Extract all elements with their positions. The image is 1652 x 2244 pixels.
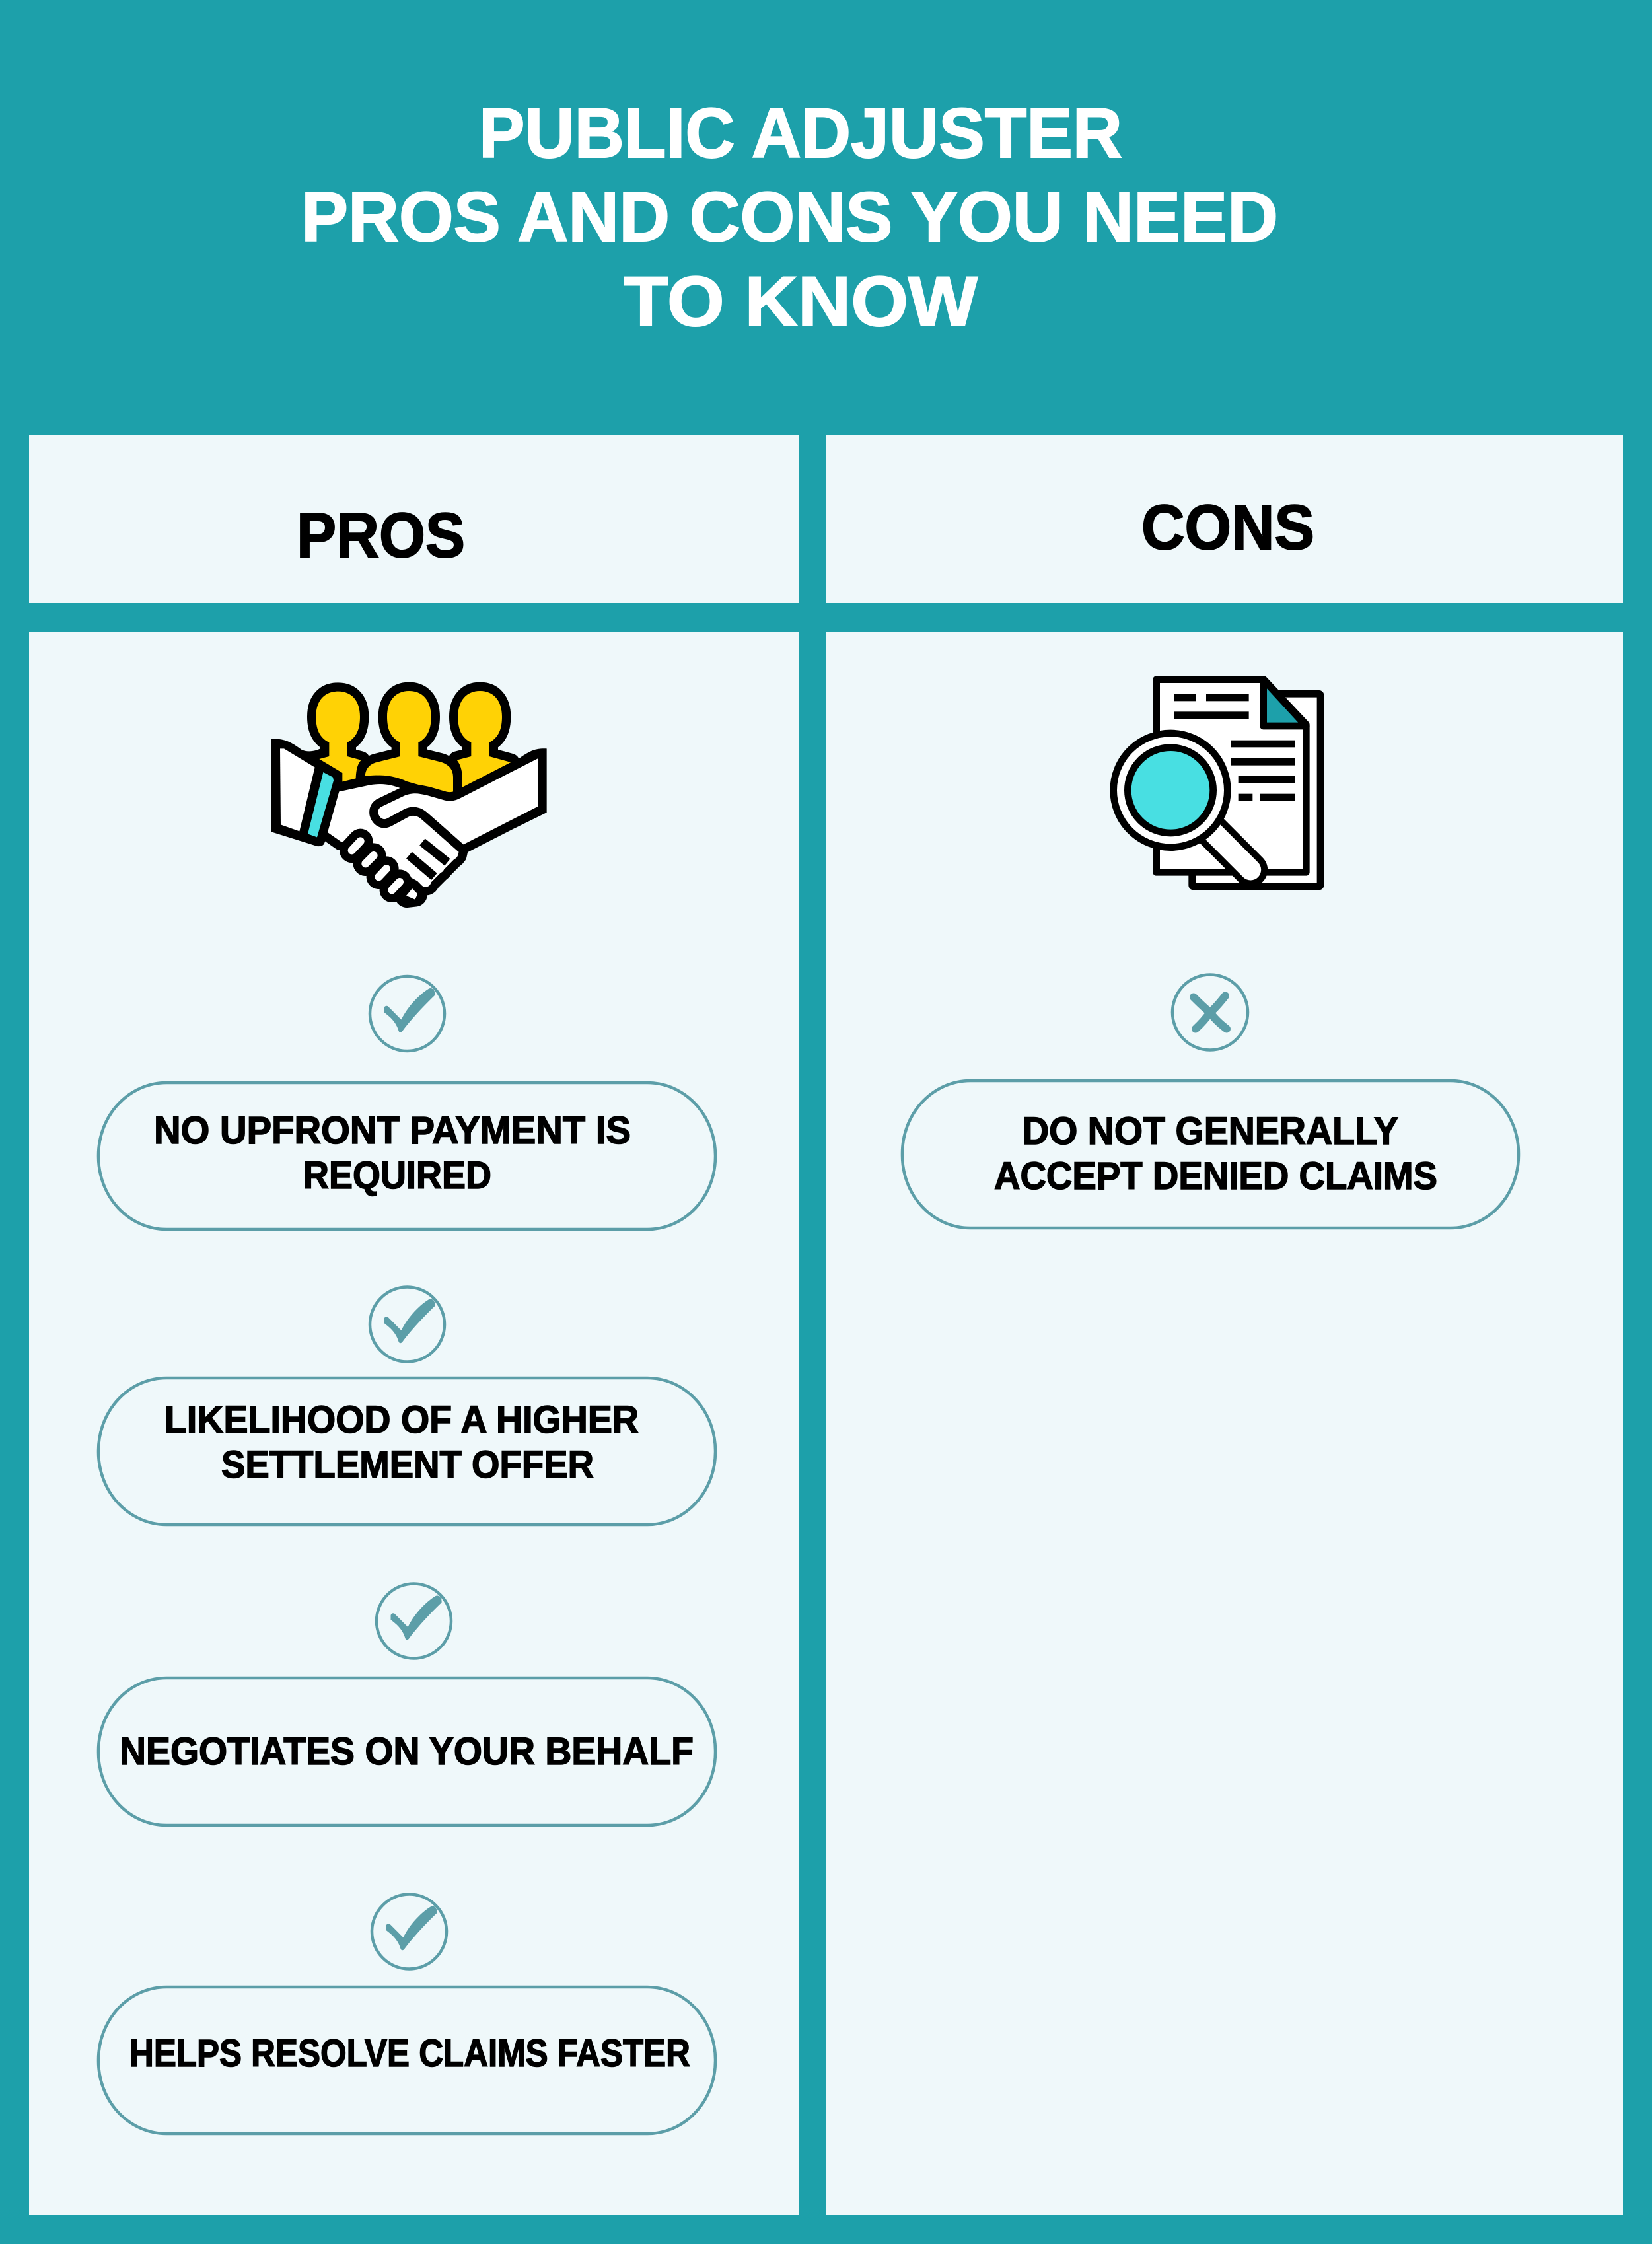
- pill: higher settlement: [98, 1378, 715, 1525]
- pill: higher settlement: LIKELIHOOD OF A HIGHER: [164, 1398, 639, 1441]
- small knuckle: [406, 888, 417, 900]
- left hand palm: [328, 784, 460, 887]
- title: [301, 93, 1278, 341]
- right person: [457, 691, 511, 787]
- title: PROS AND CONS YOU NEED: [301, 177, 1278, 256]
- right arm: [378, 758, 538, 844]
- pill: no upfront payment: [98, 1083, 715, 1229]
- pill: no upfront payment: NO UPFRONT PAYMENT IS: [154, 1109, 631, 1152]
- magnifier handle: [1207, 826, 1250, 870]
- pill: negotiates: NEGOTIATES ON YOUR BEHALF: [120, 1730, 694, 1773]
- folded corner: [1264, 680, 1306, 726]
- panel: cons heading: CONS: [1141, 492, 1314, 563]
- finger separators: [409, 842, 447, 877]
- magnifier lens: [1128, 748, 1213, 833]
- panel: cons heading: [826, 435, 1623, 603]
- panel: pros list: [29, 632, 799, 2215]
- title: TO KNOW: [624, 262, 978, 341]
- magnifier rim: [1114, 733, 1227, 848]
- title: PUBLIC ADJUSTER: [479, 93, 1122, 172]
- silhouette: [271, 739, 342, 846]
- icon: cross mark: [1172, 975, 1248, 1050]
- text lines: [1174, 694, 1295, 801]
- knuckles: [352, 841, 400, 890]
- icon: handshake with three people: [271, 691, 547, 900]
- panel: pros heading: PROS: [297, 500, 465, 571]
- icon: check mark 4: [372, 1895, 447, 1969]
- icon: check mark 1: [370, 976, 445, 1051]
- pill: no upfront payment: REQUIRED: [303, 1154, 491, 1197]
- finger outlines: [414, 842, 452, 881]
- pill: denied claims: [902, 1081, 1519, 1228]
- icon: check mark 2: [370, 1287, 445, 1362]
- pill: denied claims: ACCEPT DENIED CLAIMS: [994, 1155, 1437, 1198]
- right hand fingers: [414, 842, 452, 881]
- left person: [316, 692, 361, 781]
- pill: denied claims: DO NOT GENERALLY: [1023, 1110, 1398, 1153]
- middle person: [365, 691, 453, 793]
- pill: resolve claims faster: HELPS RESOLVE CLAIMS FASTER: [129, 2032, 690, 2075]
- pill: resolve claims faster: [98, 1987, 715, 2134]
- pill: negotiates: [98, 1678, 715, 1825]
- front page: [1157, 680, 1306, 872]
- cuff band: [308, 772, 334, 837]
- panel: pros heading: [29, 435, 799, 603]
- back page: [1192, 694, 1320, 887]
- icon: document with magnifying glass: [1114, 680, 1320, 887]
- pill: higher settlement: SETTLEMENT OFFER: [221, 1443, 594, 1486]
- icon: check mark 3: [377, 1584, 451, 1658]
- panel: cons list: [826, 632, 1623, 2215]
- shirt cuff: [280, 748, 315, 831]
